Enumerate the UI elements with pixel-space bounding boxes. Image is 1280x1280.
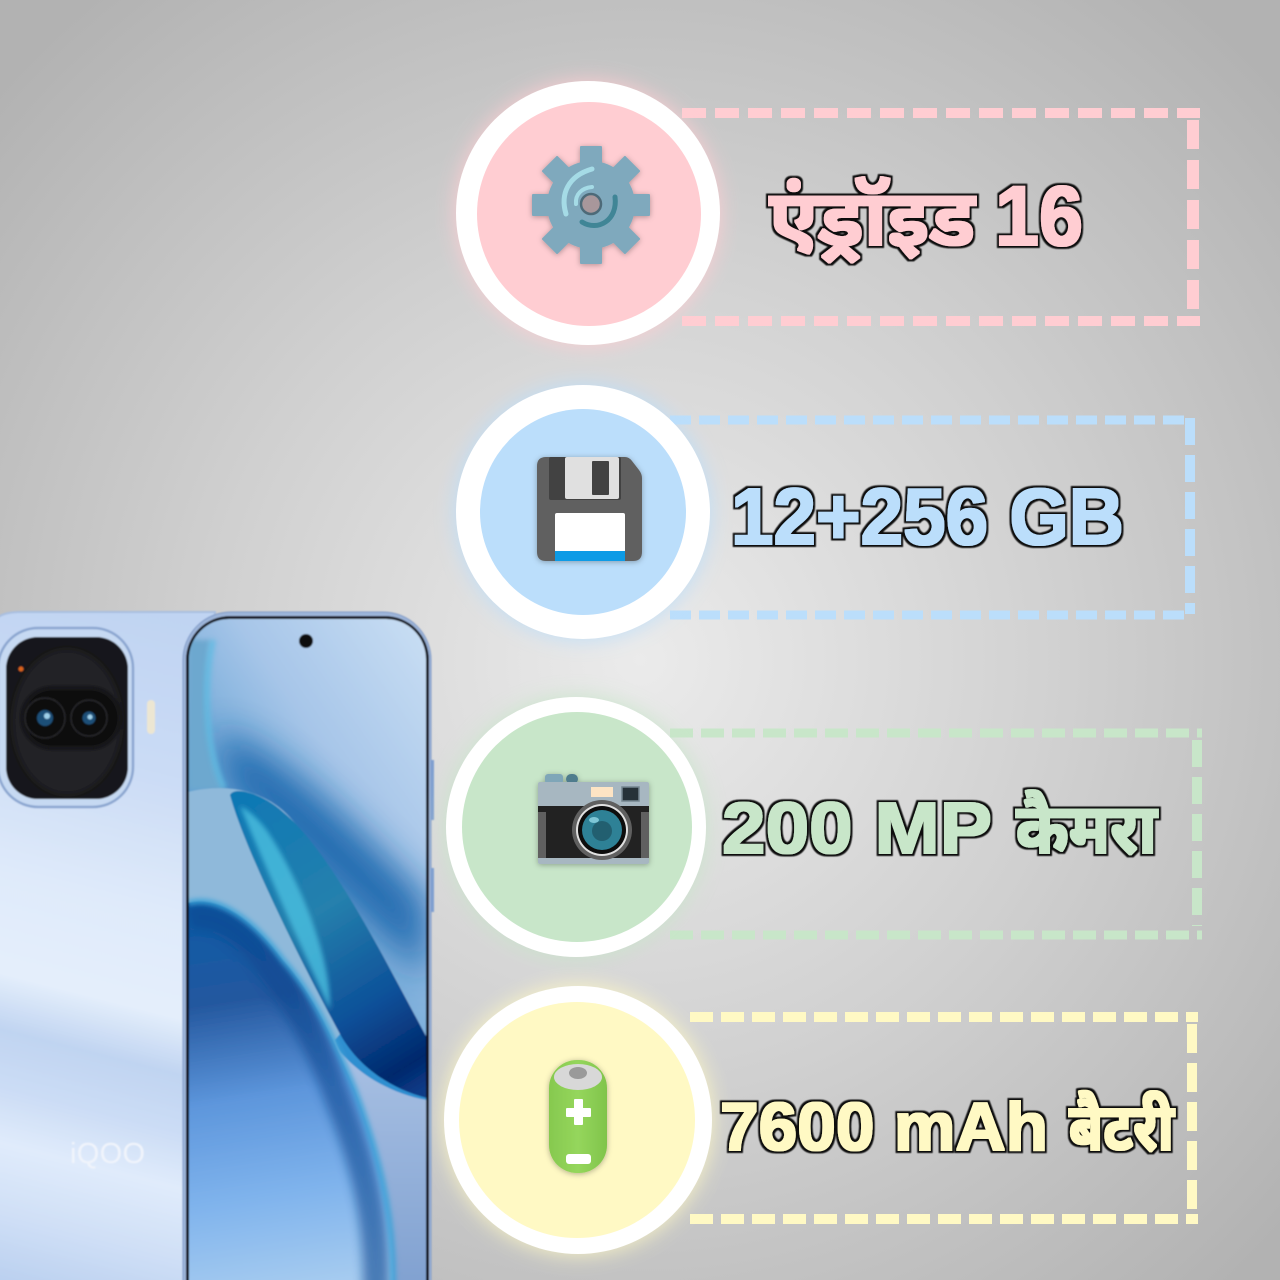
spec row: storage (455, 384, 1190, 640)
phone: front view (183, 612, 434, 1280)
icon: battery (549, 1060, 607, 1173)
badge (443, 985, 713, 1255)
label: android 16: 16 (995, 169, 1083, 263)
wallpaper (188, 618, 427, 1280)
icon: gear (532, 146, 650, 264)
badge (455, 384, 711, 640)
flash (147, 700, 155, 734)
label: camera: कैमरा (1016, 789, 1158, 868)
badge (445, 696, 707, 958)
dashed frame (670, 418, 1190, 615)
label: battery: बैटरी (1069, 1090, 1175, 1164)
dashed frame (670, 733, 1202, 935)
label: camera: 200 MP (722, 789, 992, 869)
spec row: battery (443, 985, 1198, 1255)
icon: camera (538, 774, 649, 864)
spec row: camera (445, 696, 1202, 958)
badge (455, 80, 721, 346)
dashed frame (690, 1017, 1198, 1219)
icon: floppy disk (537, 457, 642, 561)
label: android 16 (769, 169, 1083, 263)
label: battery: 7600 mAh (720, 1089, 1048, 1165)
camera module (0, 628, 133, 807)
label: camera (722, 789, 1158, 869)
dashed frame (682, 113, 1200, 321)
label: storage: 12+256 GB (731, 472, 1124, 561)
label: android 16: एंड्रॉइड (769, 174, 977, 263)
brand logo: iQOO (70, 1138, 145, 1170)
spec row: android (455, 80, 1200, 346)
phone: rear view (0, 612, 215, 1280)
punch-hole camera (299, 634, 313, 648)
